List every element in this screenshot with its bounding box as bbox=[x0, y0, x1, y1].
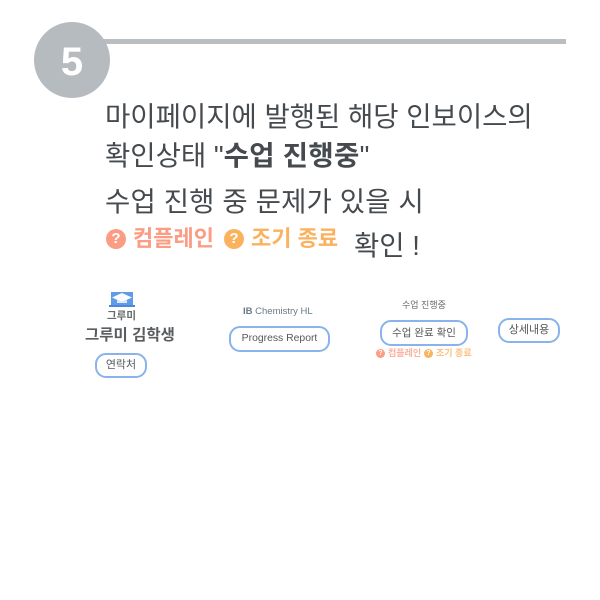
line 3: 수업 진행 중 문제가 있을 시 bbox=[105, 186, 424, 217]
icon: early end question: ? bbox=[229, 230, 239, 247]
details button: 상세내용 bbox=[509, 324, 549, 336]
lesson complete button: 수업 완료 확인 bbox=[392, 327, 456, 339]
icon: graduation cap laptop bbox=[109, 292, 135, 307]
header rule bbox=[100, 39, 566, 44]
icon: small complaint: ? bbox=[378, 350, 383, 357]
small early end label: 조기 종료 bbox=[436, 348, 472, 358]
complaint links bbox=[376, 348, 472, 358]
student column bbox=[85, 292, 175, 378]
status column bbox=[376, 300, 472, 358]
instruction text bbox=[105, 101, 533, 261]
icon: small early end bbox=[424, 349, 433, 358]
complaint label: 컴플레인 bbox=[133, 226, 214, 251]
icon: small complaint bbox=[376, 349, 385, 358]
progress report button: Progress Report bbox=[242, 333, 317, 344]
line 1: 마이페이지에 발행된 해당 인보이스의 bbox=[105, 101, 533, 132]
icon: complaint question bbox=[106, 229, 126, 249]
icon: small early end: ? bbox=[426, 350, 431, 357]
details button bbox=[498, 318, 560, 343]
lesson complete button bbox=[380, 320, 468, 346]
icon: complaint question: ? bbox=[111, 230, 121, 247]
contact button bbox=[95, 353, 147, 378]
student name: 그루미 김학생 bbox=[85, 327, 175, 344]
confirm text: 확인 ! bbox=[354, 230, 420, 261]
logo name: 그루미 bbox=[107, 310, 136, 322]
contact button: 연락처 bbox=[106, 359, 136, 371]
early end label: 조기 종료 bbox=[251, 226, 338, 251]
line 2: 확인상태 "수업 진행중" bbox=[105, 140, 369, 171]
course name: IB Chemistry HL bbox=[243, 306, 313, 317]
icon: early end question bbox=[224, 229, 244, 249]
line 4 bbox=[106, 226, 420, 261]
progress report button bbox=[229, 326, 330, 352]
step number badge bbox=[34, 22, 110, 98]
small complaint label: 컴플레인 bbox=[388, 348, 421, 358]
course column bbox=[229, 306, 330, 352]
status label: 수업 진행중 bbox=[402, 300, 446, 310]
step number badge: 5 bbox=[61, 40, 83, 84]
